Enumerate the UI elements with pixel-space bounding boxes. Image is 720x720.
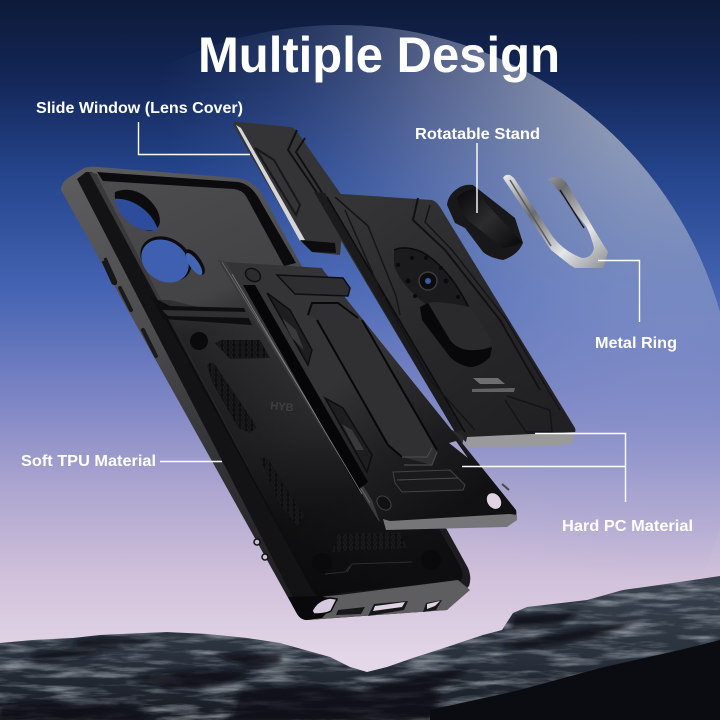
- hard PC plate: [218, 260, 517, 530]
- lens slide cover: [233, 122, 345, 255]
- folded ring crescent: [420, 303, 492, 367]
- label: hard PC material: [462, 434, 693, 535]
- dark rock shadows: [0, 610, 640, 720]
- shell black rail: [77, 172, 318, 620]
- label: metal ring: [595, 260, 677, 352]
- top slot: [277, 275, 350, 296]
- plate window lower: [325, 398, 372, 472]
- label: metal ring: Metal Ring: [595, 335, 677, 352]
- shell inner face: [97, 176, 463, 597]
- brand emboss: HYB: [270, 400, 294, 414]
- stand plate body: [312, 192, 575, 444]
- lower slot: [393, 470, 465, 492]
- phone case: soft TPU shell: [61, 167, 470, 620]
- highlight marks: [473, 378, 505, 384]
- side buttons: [103, 258, 116, 284]
- camera hole large: [115, 190, 160, 231]
- label: rotatable stand: Rotatable Stand: [415, 126, 540, 143]
- label: soft TPU material: Soft TPU Material: [21, 453, 156, 470]
- background notch between plates: [449, 441, 468, 458]
- posts: [190, 332, 208, 350]
- disc screws: [396, 256, 460, 310]
- shell lower bumper: [307, 580, 470, 620]
- rocky landscape: [0, 570, 720, 720]
- rotatable stand: [447, 185, 523, 260]
- label: slide window: [36, 100, 250, 154]
- ring stand plate: [312, 192, 575, 447]
- plate left rail: [218, 260, 380, 522]
- raised ring cap: [428, 302, 492, 353]
- camera bump step: [150, 296, 252, 325]
- bottom ports: [312, 598, 337, 614]
- plate holes: [243, 266, 263, 284]
- shell side band: [61, 167, 470, 620]
- shell rail highlight band: [89, 172, 322, 596]
- centre hole: [419, 272, 437, 290]
- camera hole medium: [132, 227, 200, 291]
- side holes: [254, 539, 260, 545]
- raised central panel: [308, 303, 437, 465]
- black strip: [243, 285, 368, 490]
- plate bottom edge: [383, 514, 517, 530]
- title: Multiple Design: [198, 27, 560, 83]
- stand plate edge: [314, 192, 463, 432]
- label: rotatable stand: [415, 126, 540, 213]
- shell inner top lip: [97, 172, 296, 266]
- plate window upper: [267, 293, 312, 365]
- label: hard PC material: Hard PC Material: [562, 518, 693, 535]
- flash hole: [181, 246, 209, 278]
- black lower corner: [288, 596, 338, 620]
- metal ring: [503, 175, 608, 268]
- label: slide window: Slide Window (Lens Cover): [36, 100, 243, 117]
- grip pads: [215, 340, 270, 359]
- rotating mount disc: [394, 248, 470, 316]
- silver slide rail: [236, 125, 305, 241]
